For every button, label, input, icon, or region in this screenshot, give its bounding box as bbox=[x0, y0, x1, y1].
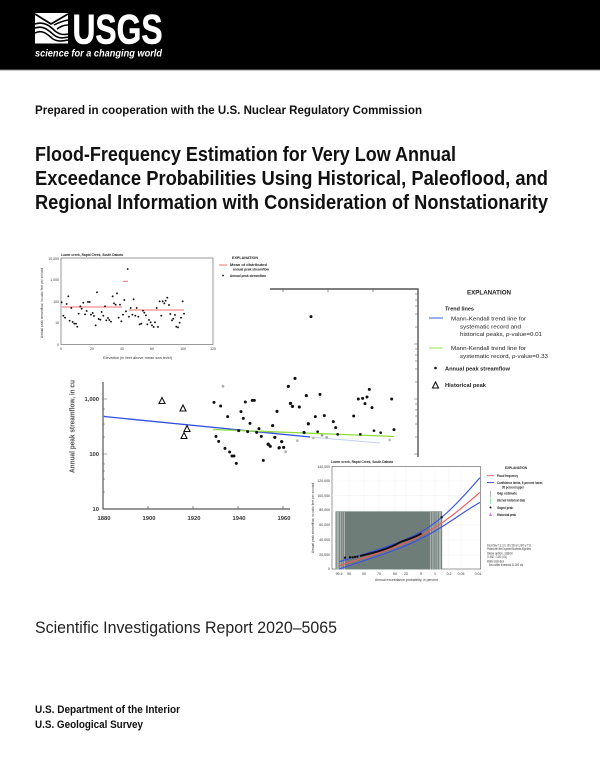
icon: USGS wave logo bbox=[35, 13, 68, 44]
y axis labels: 0 bbox=[57, 343, 59, 347]
inset legend: Interval historical data bbox=[497, 498, 526, 502]
agency: U.S. Geological Survey bbox=[35, 719, 144, 731]
legend: historical peak: Historical peak bbox=[445, 383, 487, 389]
legend: blue line: systematic record and bbox=[460, 324, 521, 330]
x axis labels: 1920 bbox=[188, 516, 200, 522]
green trend line bbox=[213, 430, 394, 436]
blue trend segment bbox=[104, 416, 380, 443]
y tick labels: 100,000 bbox=[317, 494, 330, 498]
axis labels bbox=[317, 465, 481, 576]
title: Regional Information with Consideration of Nonstationarity bbox=[35, 191, 549, 214]
x tick labels: 99.5 bbox=[336, 572, 342, 576]
x tick labels: 0.01 bbox=[475, 572, 481, 576]
y tick labels: 140,000 bbox=[317, 465, 330, 469]
inset legend: Annual peak streamflow bbox=[230, 274, 266, 278]
inset legend: Confidence limits, 5 percent lower, bbox=[497, 481, 543, 485]
mean lines bbox=[62, 281, 184, 310]
x axis labels: 20 bbox=[90, 347, 94, 351]
logo wordmark: USGS bbox=[72, 6, 162, 52]
x tick labels: 70 bbox=[377, 572, 381, 576]
station note bbox=[487, 544, 531, 567]
y tick labels: 80,000 bbox=[319, 508, 330, 512]
scatter points bbox=[61, 268, 185, 328]
grid bbox=[332, 467, 480, 569]
y axis labels bbox=[84, 397, 99, 513]
legend: blue line bbox=[429, 316, 542, 338]
y tick labels: 0 bbox=[328, 567, 330, 571]
title: Exceedance Probabilities Using Historical, Paleoflood, and bbox=[35, 167, 548, 190]
x tick labels: 90 bbox=[362, 572, 366, 576]
title bbox=[35, 143, 549, 214]
x tick labels: 50 bbox=[393, 572, 397, 576]
legend: green line: Mann-Kendall trend line for bbox=[451, 346, 526, 352]
inset legend bbox=[487, 466, 543, 517]
station note: G: MSE = 0.302 (0.01) bbox=[487, 555, 507, 559]
y axis labels: 10 bbox=[55, 321, 59, 325]
logo tagline: science for a changing world bbox=[35, 48, 163, 60]
legend: blue line: historical peaks, p-value=0.01 bbox=[460, 332, 542, 338]
x tick labels bbox=[336, 572, 481, 576]
white background bbox=[300, 457, 570, 591]
plot frame bbox=[61, 258, 213, 344]
x axis labels bbox=[98, 516, 290, 522]
y axis labels: 1,000 bbox=[84, 397, 99, 403]
x tick labels: 20 bbox=[404, 572, 408, 576]
legend: green line bbox=[429, 346, 548, 360]
y axis labels: 10,000 bbox=[48, 257, 59, 261]
station note: Flood flow 7.3, 3.0, 100, 500 yr 1,000 yr T10 bbox=[487, 544, 531, 548]
x axis labels: 1900 bbox=[143, 516, 155, 522]
x tick labels: 95 bbox=[347, 572, 351, 576]
main chart explanation bbox=[429, 290, 548, 389]
x axis labels: 1880 bbox=[98, 516, 110, 522]
legend: annual peak: Annual peak streamflow bbox=[445, 366, 510, 372]
y tick labels: 120,000 bbox=[317, 479, 330, 483]
trend lines subheading: Trend lines bbox=[445, 306, 474, 312]
x axis labels: 100 bbox=[180, 347, 186, 351]
annual peaks right part bbox=[267, 315, 395, 449]
y axis title: Annual peak streamflow, in cubic feet per second bbox=[311, 483, 315, 553]
inset legend: Mean of distributed bbox=[230, 263, 267, 267]
station note: Plotted with the Expected Moments Algorithm bbox=[487, 547, 531, 551]
y axis labels: 10 bbox=[93, 507, 99, 513]
x axis labels: 120 bbox=[210, 347, 216, 351]
y axis labels: 1,000 bbox=[50, 278, 59, 282]
x tick labels: 1 bbox=[434, 572, 436, 576]
plot frame bbox=[332, 466, 480, 569]
inset chart: upper left bbox=[40, 253, 269, 360]
x axis title: Elevation (in feet above mean sea level) bbox=[103, 356, 173, 360]
x axis labels: 60 bbox=[150, 347, 154, 351]
inset legend: Flood frequency bbox=[497, 474, 519, 478]
report number: Scientific Investigations Report 2020–5065 bbox=[35, 618, 337, 637]
x axis labels: 1940 bbox=[233, 516, 245, 522]
y axis labels: 100 bbox=[53, 300, 59, 304]
annual peaks left part bbox=[212, 377, 310, 465]
y axis title: Annual peak streamflow, in cu bbox=[68, 380, 76, 473]
chart title: Lower creek, Rapid Creek, South Dakota bbox=[331, 460, 394, 464]
x tick labels: 0.05 bbox=[458, 572, 464, 576]
x axis labels: 1960 bbox=[278, 516, 290, 522]
x axis labels bbox=[60, 347, 216, 351]
y axis labels bbox=[48, 257, 59, 347]
station note: low-outlier threshold 11,000 cfs bbox=[489, 563, 523, 567]
inset legend bbox=[219, 256, 269, 278]
y tick labels bbox=[317, 465, 330, 571]
x axis title: Annual exceedance probability, in percent bbox=[375, 578, 439, 582]
legend: blue line: Mann-Kendall trend line for bbox=[451, 316, 526, 322]
y tick labels: 60,000 bbox=[319, 523, 330, 527]
station note: Multiple Grubbs-Beck bbox=[487, 560, 504, 564]
legend heading: EXPLANATION bbox=[467, 290, 511, 296]
cooperation statement: Prepared in cooperation with the U.S. Nuclear Regulatory Commission bbox=[35, 103, 422, 117]
inset chart: flood frequency bbox=[300, 457, 570, 591]
y axis labels: 100 bbox=[89, 452, 99, 458]
inset legend: 95 percent upper bbox=[502, 486, 524, 490]
x tick labels: 5 bbox=[420, 572, 422, 576]
historical peaks bbox=[159, 398, 190, 438]
title: Flood-Frequency Estimation for Very Low Annual bbox=[35, 143, 456, 166]
peak points bbox=[344, 516, 443, 559]
y axis title: Annual peak streamflow, in cubic feet per second bbox=[40, 268, 44, 338]
chart frame and axes bbox=[103, 289, 418, 509]
inset legend: EXPLANATION bbox=[232, 256, 258, 260]
x axis labels: 0 bbox=[60, 347, 62, 351]
chart title: Lower creek, Rapid Creek, South Dakota bbox=[61, 253, 124, 257]
x tick labels: 0.2 bbox=[447, 572, 451, 576]
confidence interval block bbox=[336, 512, 442, 569]
frequency curves bbox=[339, 478, 480, 569]
legend: green line: systematic record, p-value=0.33 bbox=[460, 354, 548, 360]
department: U.S. Department of the Interior bbox=[35, 704, 181, 716]
inset legend: Gap estimate bbox=[497, 492, 517, 496]
station note: Skew option, station bbox=[487, 552, 513, 556]
inset legend: annual peak streamflow bbox=[233, 268, 269, 272]
inset legend: EXPLANATION bbox=[505, 466, 527, 470]
y tick labels: 20,000 bbox=[319, 553, 330, 557]
main trend chart bbox=[68, 289, 418, 522]
header banner bbox=[0, 0, 600, 70]
y tick labels: 40,000 bbox=[319, 538, 330, 542]
x axis labels: 40 bbox=[120, 347, 124, 351]
inset legend: Historical peak bbox=[497, 513, 517, 517]
inset legend: Gaged peak bbox=[497, 506, 514, 510]
